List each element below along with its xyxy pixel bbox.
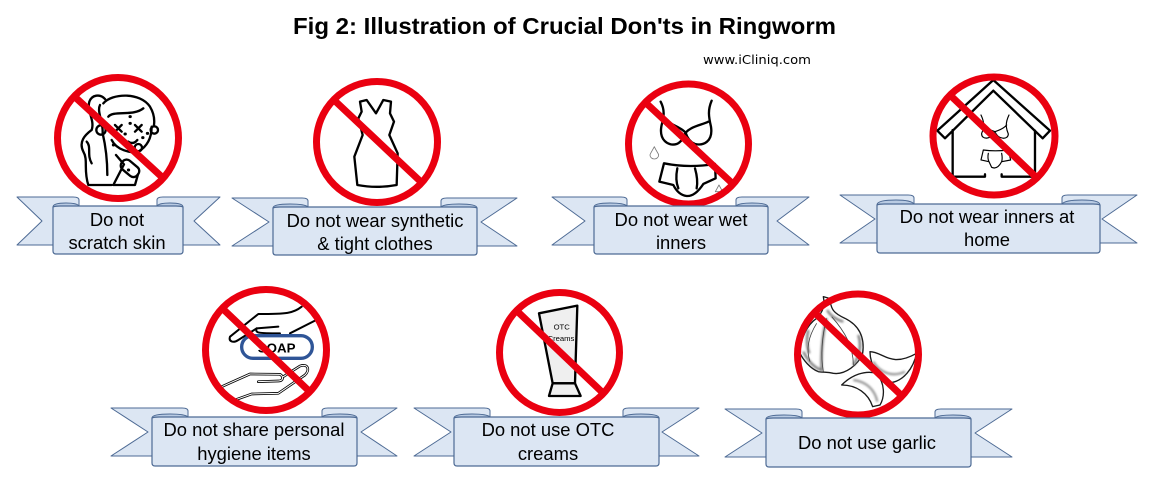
label <box>615 209 747 253</box>
label <box>482 419 614 464</box>
label: & tight clothes <box>317 233 433 254</box>
label: scratch skin <box>68 232 166 253</box>
garlic bulb <box>800 297 863 374</box>
prohibition sign <box>500 292 620 412</box>
label: Do not wear wet <box>615 209 747 230</box>
ribbon banner <box>414 408 699 466</box>
label: Do not use garlic <box>798 432 936 453</box>
panel: do not use garlic <box>725 294 1012 467</box>
label: inners <box>656 232 706 253</box>
label: Do not wear synthetic <box>287 210 463 231</box>
label: hygiene items <box>197 443 311 464</box>
label: creams <box>518 443 578 464</box>
prohibition sign <box>798 294 918 415</box>
panel: do not use OTC creams <box>414 292 699 466</box>
icon: cream tube <box>539 306 581 396</box>
icon: house with underwear <box>937 80 1050 177</box>
panel: do not share personal hygiene items <box>111 290 397 466</box>
bulb shading <box>803 310 860 372</box>
lower clove <box>842 372 883 407</box>
panel: do not scratch skin <box>17 78 220 254</box>
label <box>68 209 166 253</box>
label <box>287 210 463 254</box>
icon: dress <box>354 100 398 187</box>
soap bar: SOAP <box>258 341 296 356</box>
prohibition sign <box>628 84 748 204</box>
upper clove shading <box>873 362 905 374</box>
icon: wet underwear <box>650 101 723 196</box>
label: home <box>964 229 1010 250</box>
tube label: OTC <box>554 323 570 332</box>
panel: do not wear wet inners <box>552 84 809 254</box>
ribbon banner <box>552 197 809 254</box>
title: Fig 2: Illustration of Crucial Don'ts in Ringworm <box>293 13 836 39</box>
ribbon banner <box>725 409 1012 467</box>
prohibition sign <box>933 77 1055 195</box>
prohibition sign <box>58 78 178 198</box>
ribbon banner <box>17 197 220 254</box>
label: Do not <box>90 209 144 230</box>
source credit: www.iCliniq.com <box>703 52 811 67</box>
prohibition sign <box>316 82 438 202</box>
panel: do not wear synthetic and tight clothes <box>232 82 517 255</box>
label: Do not use OTC <box>482 419 614 440</box>
ribbon banner <box>111 408 397 466</box>
lower hand <box>222 365 308 399</box>
label: Do not share personal <box>164 419 344 440</box>
label <box>164 419 344 464</box>
prohibition sign <box>206 290 326 410</box>
icon: garlic <box>800 297 917 407</box>
panel: do not wear inners at home <box>840 77 1137 253</box>
lower clove shading <box>853 380 877 402</box>
upper clove <box>870 352 917 383</box>
ribbon banner <box>232 198 517 255</box>
upper hand <box>230 307 315 342</box>
icon: woman scratching skin <box>82 96 158 185</box>
label: Do not wear inners at <box>900 206 1074 227</box>
tube label: Creams <box>548 334 575 343</box>
icon: hands sharing soap <box>222 307 315 399</box>
ribbon banner <box>840 195 1137 253</box>
tube label <box>548 323 575 343</box>
bulb segment lines <box>808 317 853 372</box>
label <box>900 206 1074 250</box>
